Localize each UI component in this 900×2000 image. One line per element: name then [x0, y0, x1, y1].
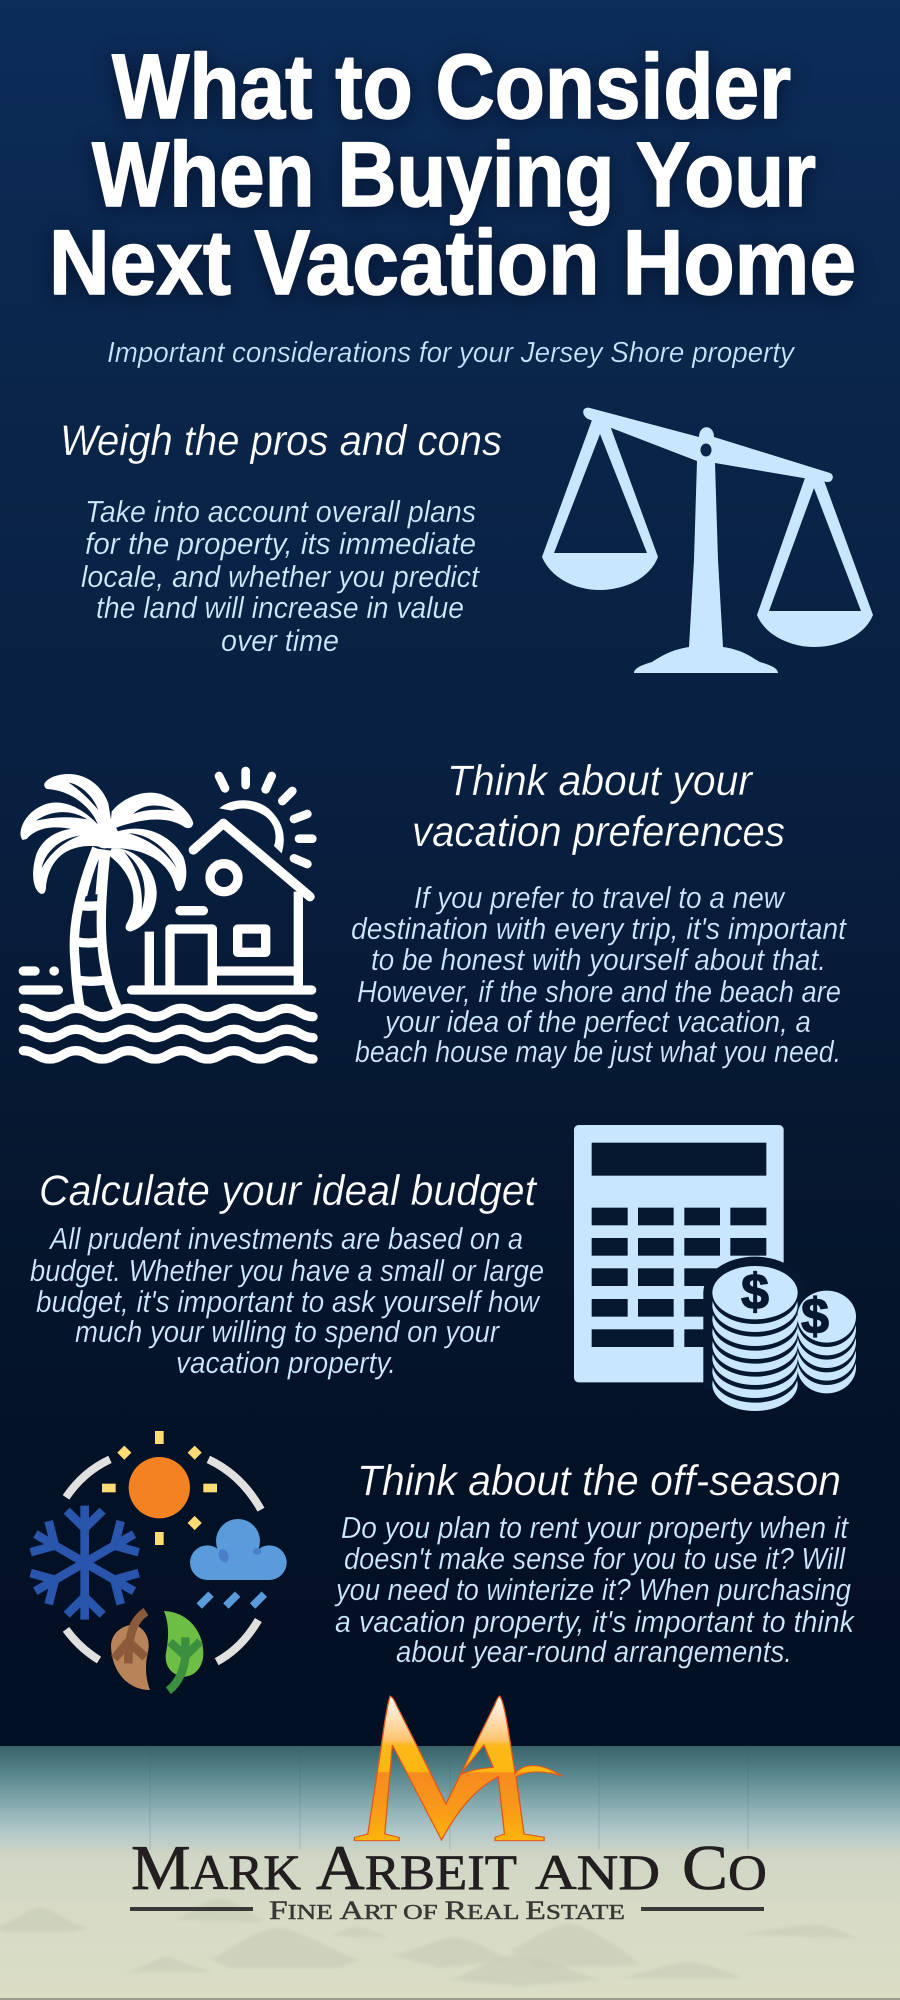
text block: weigh the pros and cons — [81, 494, 480, 658]
text block: weigh the pros and cons: over time — [221, 623, 339, 658]
panel: off-season — [26, 1431, 855, 1691]
text block: vacation preferences: to be honest with yourself about that. — [371, 942, 826, 977]
sun — [102, 1431, 217, 1545]
large coin stack — [712, 1264, 798, 1411]
logo: company name: ARBEIT — [316, 1832, 517, 1903]
text block: vacation preferences — [351, 880, 847, 1069]
text block: ideal budget: vacation property. — [176, 1345, 396, 1380]
text block: off-season: Do you plan to rent your property when it — [341, 1510, 849, 1545]
heading: think about your vacation preferences — [412, 757, 785, 856]
icon: palm tree and beach house — [21, 771, 313, 1059]
text block: ideal budget — [30, 1221, 544, 1380]
palm trunk — [74, 848, 119, 1012]
panel: vacation preferences — [21, 757, 847, 1069]
text block: weigh the pros and cons: the land will increase in value — [96, 590, 464, 625]
small coin stack — [797, 1288, 856, 1393]
waves — [23, 911, 313, 1059]
sun — [219, 800, 284, 853]
logo: company name: MARK — [131, 1832, 301, 1903]
text block: vacation preferences: If you prefer to travel to a new — [414, 880, 786, 915]
heading: calculate your ideal budget: Calculate your ideal budget — [39, 1167, 538, 1215]
logo: company name: CO — [682, 1832, 767, 1903]
rain cloud — [190, 1519, 287, 1609]
icon: calculator and coins — [574, 1125, 856, 1411]
snowflake — [26, 1506, 143, 1620]
small coin stack: $ — [801, 1288, 829, 1344]
heading: think about your vacation preferences: Think about your — [447, 757, 754, 805]
title: What to Consider — [112, 36, 791, 138]
frond slivers — [36, 782, 177, 910]
logo: tagline — [130, 1896, 764, 1925]
text block: off-season: a vacation property, it's important to think — [335, 1604, 855, 1639]
coin halo — [703, 1257, 807, 1329]
spring leaf — [164, 1611, 203, 1691]
text block: ideal budget: All prudent investments are based on a — [48, 1221, 523, 1256]
text block: vacation preferences: destination with every trip, it's important — [351, 911, 847, 946]
text block: weigh the pros and cons: Take into account overall plans — [85, 494, 476, 529]
heading: weigh the pros and cons: Weigh the pros and cons — [60, 417, 502, 465]
logo: company name — [131, 1832, 767, 1903]
title: When Buying Your — [92, 124, 816, 226]
icon: balance scales — [542, 408, 873, 673]
footer band — [0, 1746, 900, 2000]
text block: vacation preferences: your idea of the perfect vacation, a — [383, 1004, 811, 1039]
subtitle: Important considerations for your Jersey Shore property — [107, 337, 795, 369]
palm fronds — [44, 774, 113, 830]
text block: vacation preferences: However, if the shore and the beach are — [357, 974, 841, 1009]
heading: think about the off-season: Think about the off-season — [357, 1457, 841, 1505]
mountains — [0, 1898, 860, 1986]
large coin stack: $ — [741, 1264, 769, 1320]
icon: four seasons — [26, 1431, 287, 1691]
logo: tagline: FINE A RT OF REAL ESTATE — [269, 1896, 625, 1925]
text block: weigh the pros and cons: for the property, its immediate — [85, 526, 476, 561]
text block: ideal budget: much your willing to spend on your — [75, 1314, 500, 1349]
text block: weigh the pros and cons: locale, and whether you predict — [81, 559, 480, 594]
autumn leaf — [111, 1612, 150, 1690]
text block: off-season — [334, 1510, 855, 1669]
text block: off-season: doesn't make sense for you to use it? Will — [344, 1541, 846, 1576]
ring segments — [66, 1459, 261, 1662]
panel: weigh the pros and cons — [60, 408, 873, 673]
logo: orange M — [354, 1696, 562, 1841]
calculator — [574, 1125, 784, 1382]
title — [49, 36, 856, 314]
heading: think about your vacation preferences: vacation preferences — [412, 808, 785, 856]
logo: company name: AND — [535, 1844, 660, 1900]
text block: off-season: about year-round arrangements. — [396, 1634, 792, 1669]
text block: ideal budget: budget. Whether you have a small or large — [30, 1253, 544, 1288]
text block: ideal budget: budget, it's important to ask yourself how — [36, 1284, 541, 1319]
house — [149, 823, 310, 990]
panel: ideal budget — [30, 1125, 856, 1411]
